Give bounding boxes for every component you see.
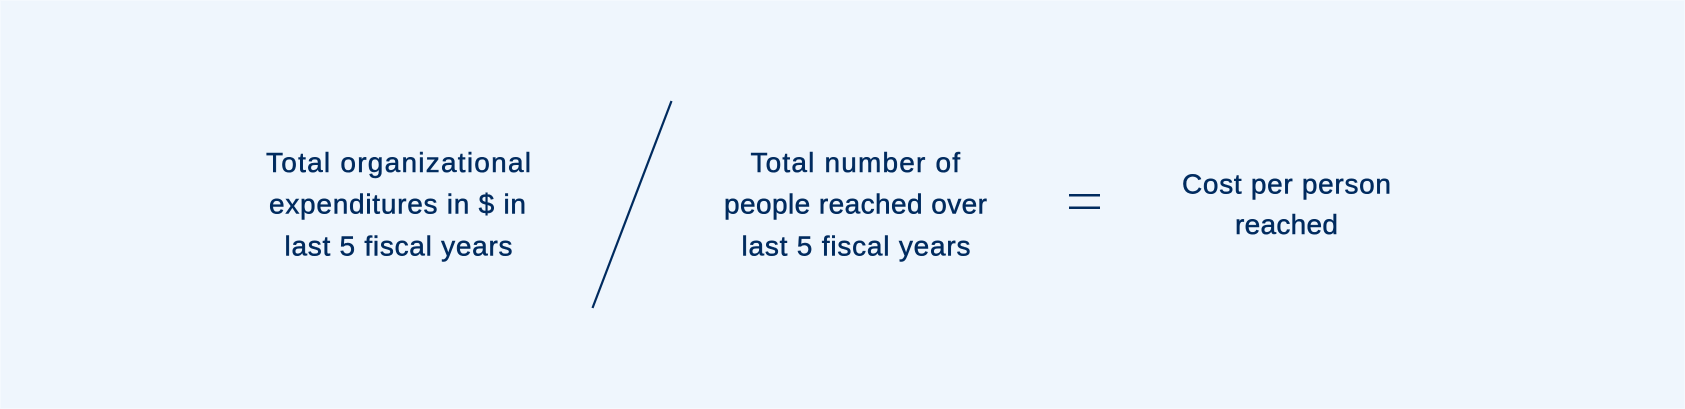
text block: cost per person reached	[1182, 168, 1391, 240]
text block: total organizational expenditures: expenditures in $ in	[269, 188, 526, 220]
icon: equals sign	[1069, 194, 1100, 209]
text block: total number of people reached: last 5 fiscal years	[742, 230, 970, 262]
text block: cost per person reached: reached	[1235, 209, 1338, 240]
text block: total organizational expenditures: Total organizational	[266, 147, 531, 178]
text block: total organizational expenditures: last 5 fiscal years	[284, 230, 512, 262]
text block: cost per person reached: Cost per person	[1182, 168, 1391, 200]
text block: total number of people reached: Total number of	[750, 147, 960, 178]
text block: total organizational expenditures	[266, 147, 531, 262]
text block: total number of people reached: people reached over	[724, 188, 987, 220]
text block: total number of people reached	[724, 147, 987, 262]
icon: division slash	[592, 101, 672, 308]
